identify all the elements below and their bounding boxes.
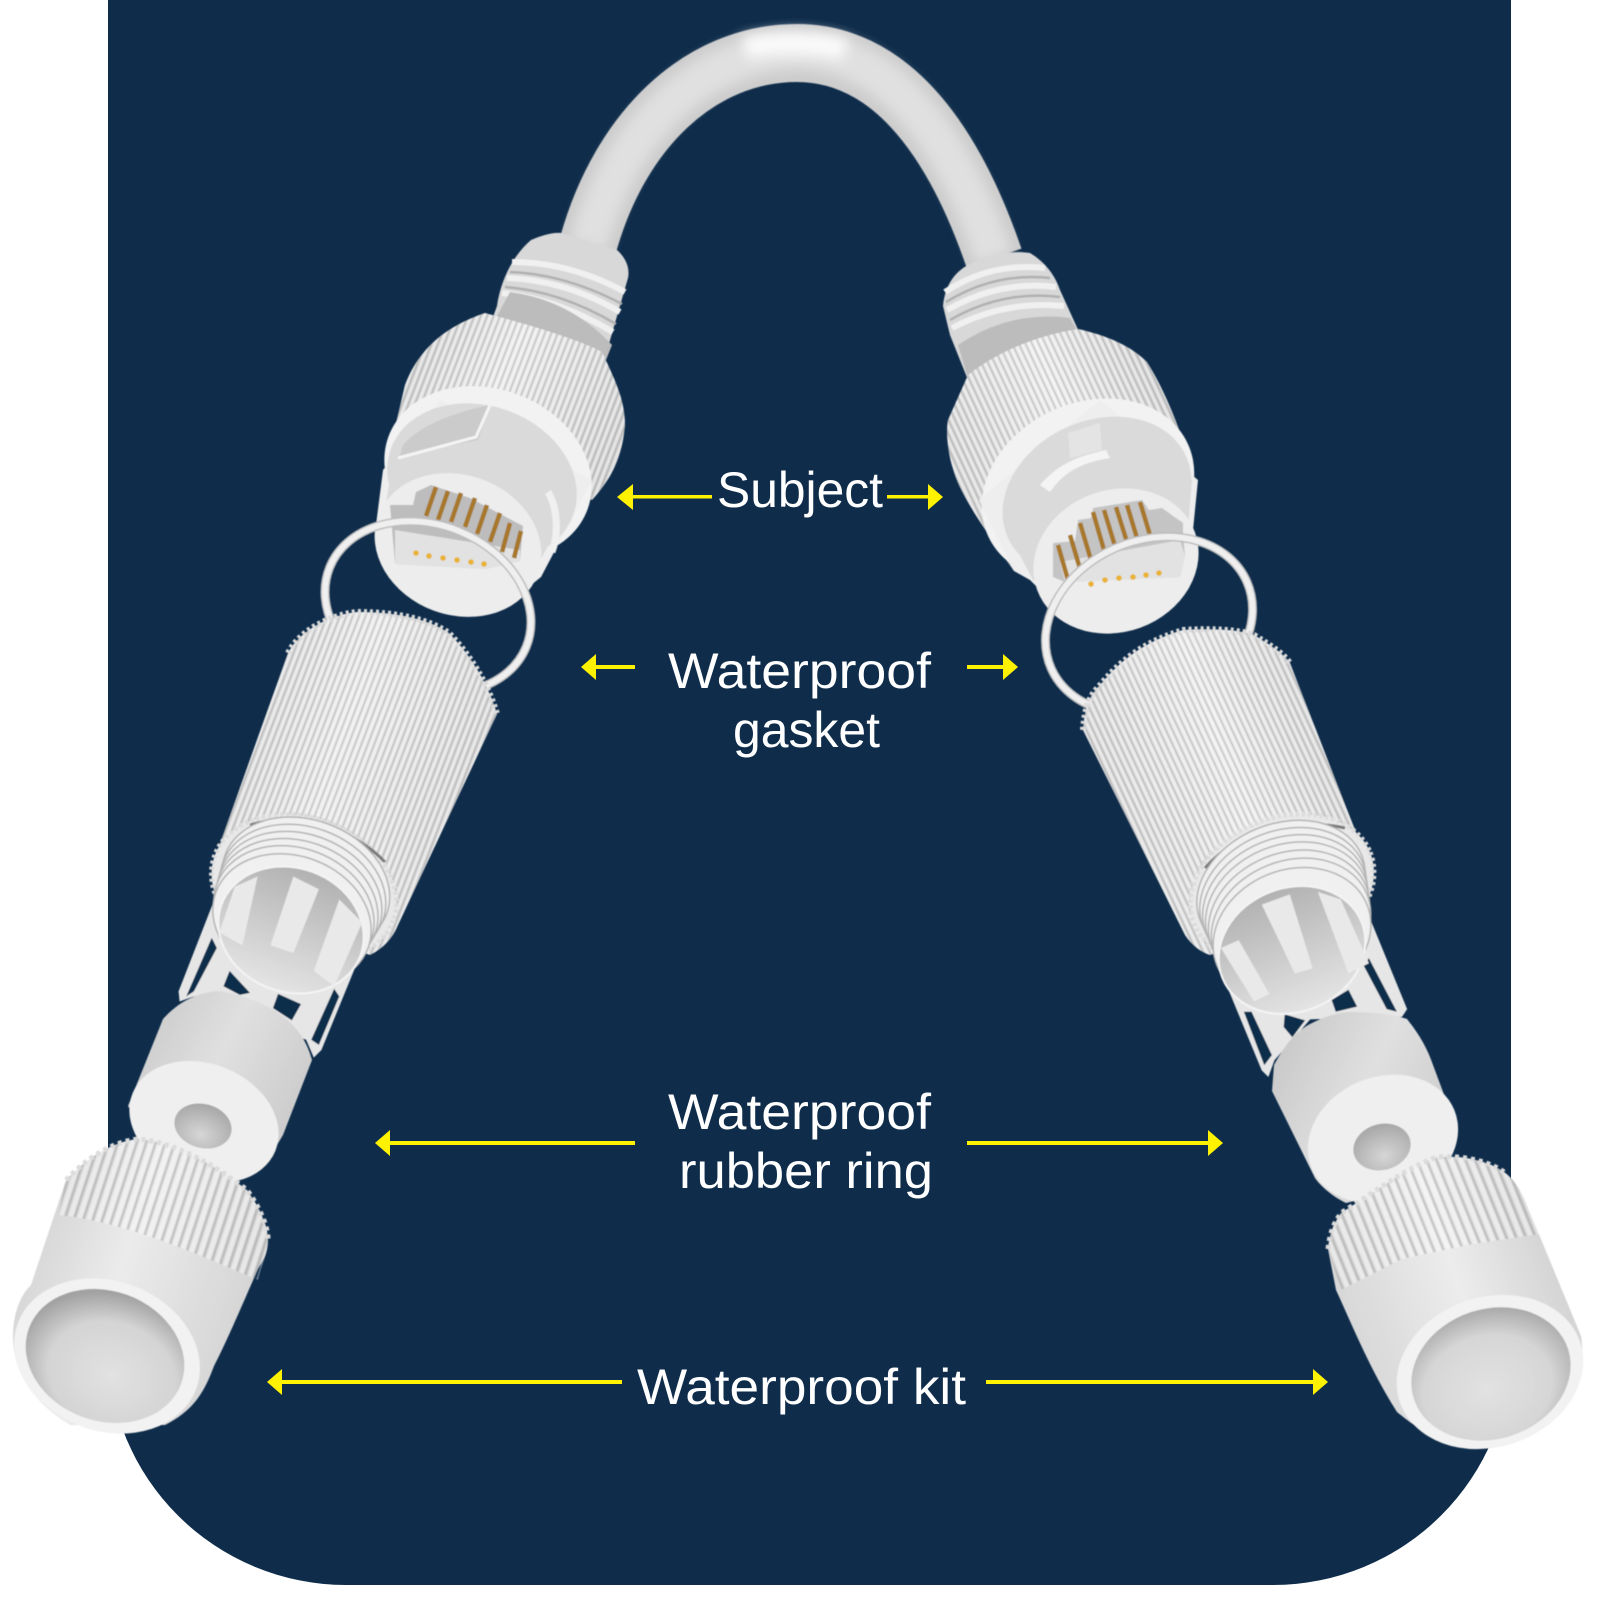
right waterproof gasket ring [1017, 505, 1281, 745]
cable [588, 44, 994, 258]
left rubber ring [111, 991, 312, 1205]
right screw thread [1176, 796, 1391, 1026]
right threaded body [1083, 629, 1407, 1077]
left collar nut [360, 313, 625, 610]
left threaded body [179, 612, 497, 1058]
label: Waterproof rubber ring: rubber ring [679, 1143, 933, 1199]
label: Waterproof gasket: Waterproof [668, 643, 931, 699]
right collar nut [947, 329, 1224, 615]
right end cap [1328, 1157, 1600, 1473]
left strain relief boot [490, 233, 629, 375]
label: Waterproof rubber ring [668, 1084, 933, 1199]
label: Waterproof gasket: gasket [733, 702, 880, 758]
left end cap [0, 1139, 268, 1459]
arrows: Waterproof rubber ring [375, 1130, 1223, 1156]
right connector head [943, 252, 1281, 745]
left finger cage [179, 887, 367, 1058]
right finger cage [1213, 897, 1407, 1077]
left screw thread [194, 794, 409, 1008]
right rubber ring [1272, 1012, 1478, 1225]
left connector head [299, 233, 629, 723]
right ribbed sleeve [1083, 629, 1396, 988]
left waterproof gasket ring [299, 491, 557, 723]
arrows: Waterproof kit [267, 1369, 1328, 1395]
left opening with tabs [200, 846, 382, 1014]
right strain relief boot [943, 252, 1085, 385]
arrows: Subject [617, 484, 943, 510]
label: Waterproof gasket [668, 643, 931, 758]
right RJ45 socket face [1013, 466, 1219, 656]
label: Waterproof kit: Waterproof kit [637, 1359, 966, 1415]
left gold pins [426, 487, 521, 558]
arrows: Waterproof gasket [581, 654, 1018, 680]
right opening with tabs [1199, 864, 1385, 1036]
label: Waterproof rubber ring: Waterproof [668, 1084, 931, 1140]
label: Subject: Subject [717, 462, 883, 518]
left ribbed sleeve [191, 612, 497, 986]
right gold pins [1058, 502, 1150, 580]
left RJ45 socket face [354, 450, 562, 640]
